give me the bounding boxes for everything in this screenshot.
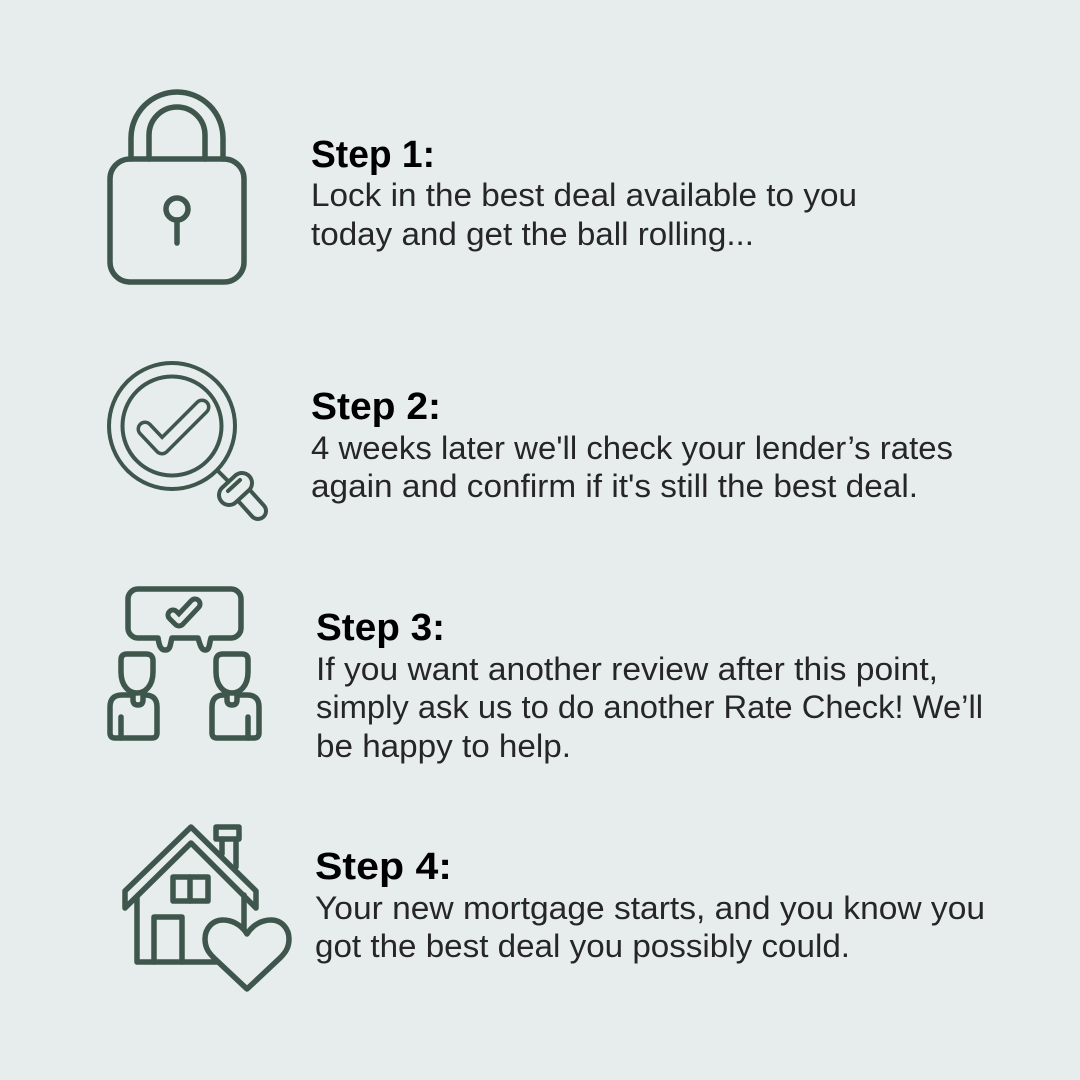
heading: step 4: Step 4: — [315, 846, 452, 888]
heading: step 3: Step 3: — [316, 607, 445, 649]
text: step 2 line 2: again and confirm if it's still the best deal. — [311, 468, 918, 504]
icon: magnifier with check mark — [109, 363, 258, 511]
text: step 1 line 2: today and get the ball rolling... — [311, 216, 754, 252]
icon: house with heart — [125, 827, 289, 989]
icon: padlock — [110, 92, 244, 282]
step 3 text — [316, 607, 983, 764]
icon: two people with speech bubble — [110, 589, 259, 738]
heading: step 2: Step 2: — [311, 386, 441, 428]
text: step 3 line 3: be happy to help. — [316, 728, 571, 764]
text: step 2 line 1: 4 weeks later we'll check your lender’s rates — [311, 430, 953, 466]
text: step 1 line 1: Lock in the best deal available to you — [311, 177, 857, 213]
step 4 text — [315, 846, 985, 964]
step 1 text — [311, 134, 857, 252]
text: step 4 line 1: Your new mortgage starts, and you know you — [315, 890, 985, 926]
text: step 4 line 2: got the best deal you possibly could. — [315, 928, 850, 964]
text: step 3 line 1: If you want another review after this point, — [316, 651, 938, 687]
step 2 text — [311, 386, 953, 504]
text: step 3 line 2: simply ask us to do another Rate Check! We’ll — [316, 689, 983, 725]
heading: step 1: Step 1: — [311, 134, 435, 176]
